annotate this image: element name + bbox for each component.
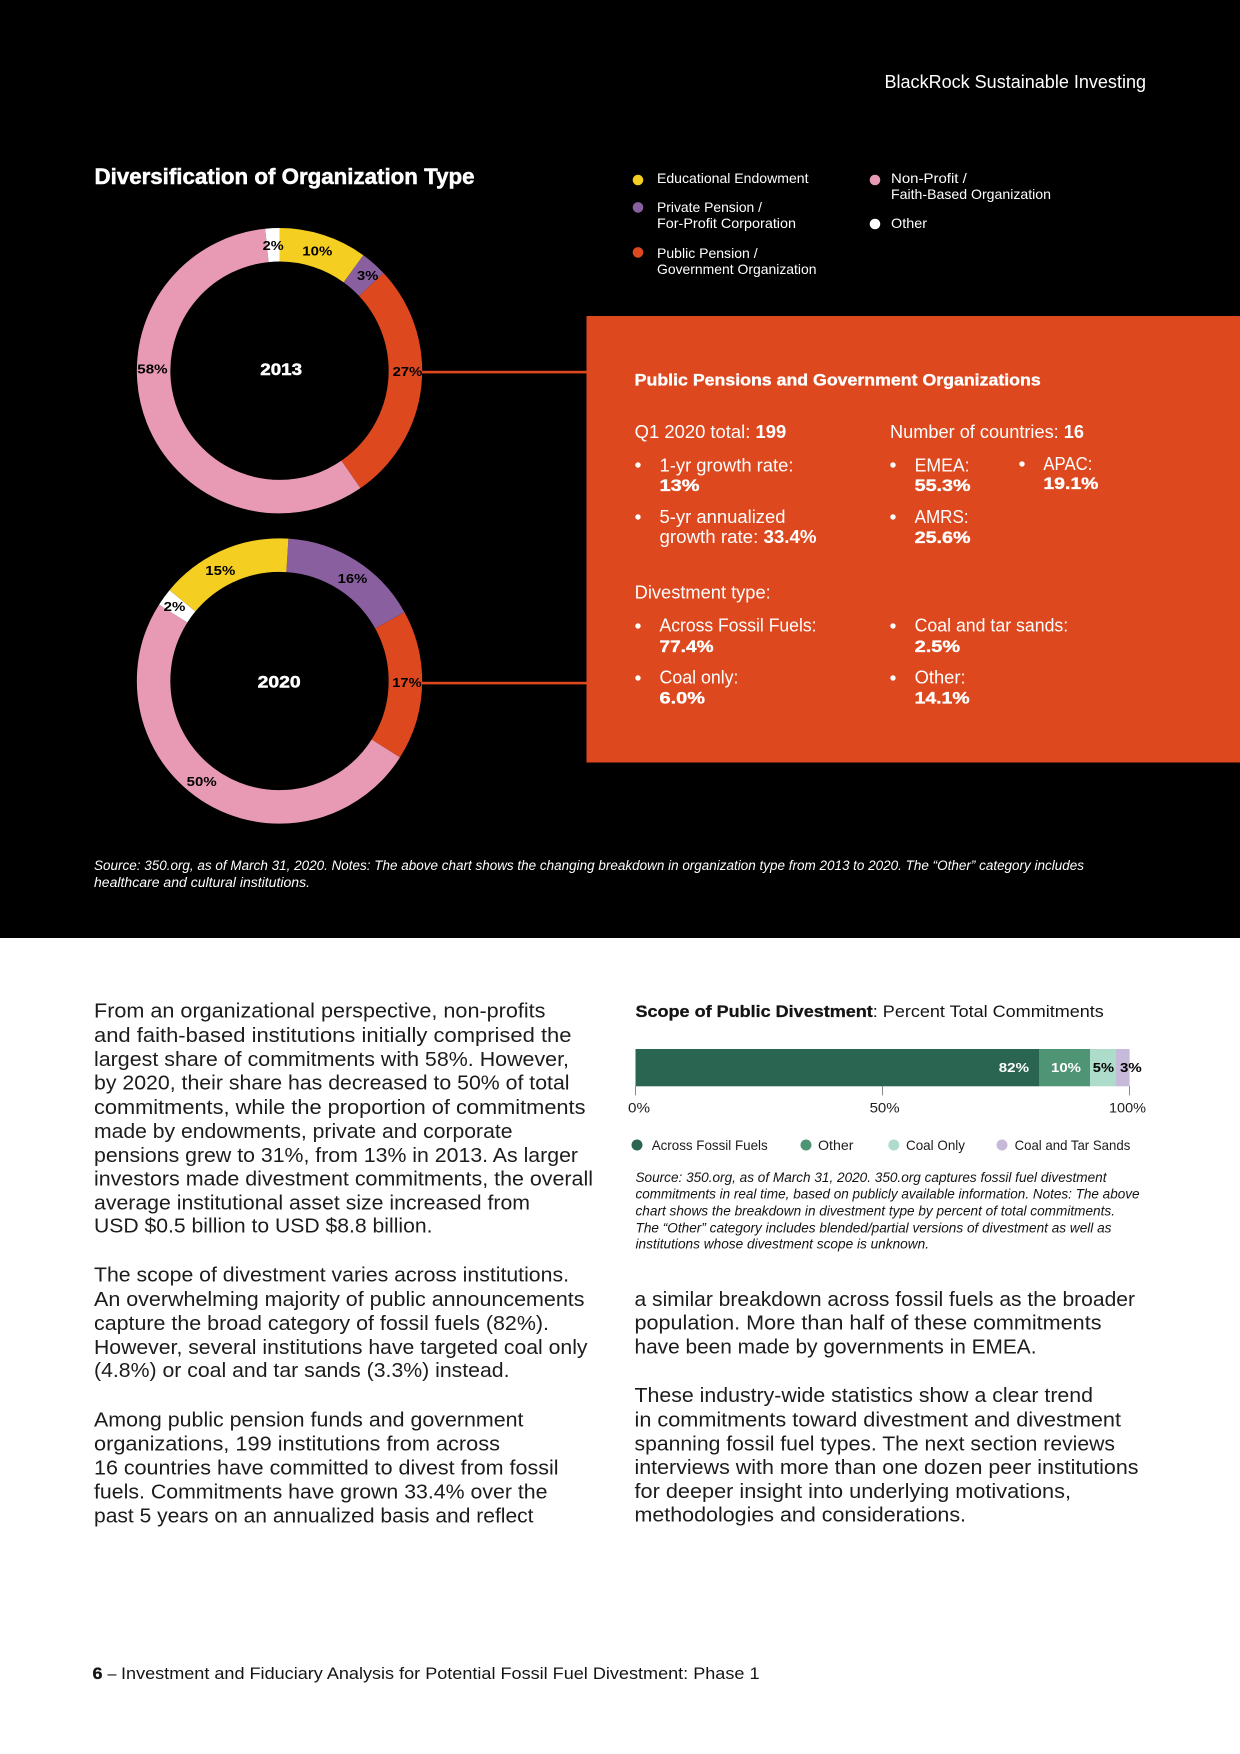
text block: right column body copy: have been made by governments in EMEA.	[634, 1337, 1036, 1359]
donut chart: 2013: 3%	[357, 268, 379, 283]
text block: left column body copy: largest share of commitments with 58%. However,	[94, 1049, 569, 1071]
source note: divestment chart: chart shows the breakdown in divestment type by percent of total commitments.	[636, 1204, 1115, 1219]
stat heading: divestment type: Divestment type:	[635, 583, 771, 603]
axis ticks and labels: 50%	[870, 1100, 900, 1116]
text block: right column body copy: a similar breakdown across fossil fuels as the broader	[634, 1289, 1135, 1311]
bullets: growth rates: 1-yr growth rate:	[660, 455, 794, 475]
bullets: divestment types: 2.5%	[915, 637, 960, 656]
legend: organization types	[633, 170, 1051, 277]
chart title: Scope of Public Divestment : Percent Total Commitments	[636, 1002, 1104, 1021]
text block: left column body copy: USD $0.5 billion to USD $8.8 billion.	[94, 1216, 432, 1238]
bullets: divestment types: 77.4%	[660, 637, 714, 656]
legend: divestment scope: Coal and Tar Sands	[1015, 1137, 1130, 1153]
bullets: divestment types: 6.0%	[660, 689, 705, 708]
text block: left column body copy: commitments, while the proportion of commitments	[94, 1097, 586, 1119]
text block: left column body copy: Among public pension funds and government	[94, 1410, 524, 1432]
footer: page number and document title: Investment and Fiduciary Analysis for Potential Fossil Fuel Divestment: Phase 1	[121, 1664, 760, 1683]
stacked bar: 10%	[1051, 1060, 1081, 1075]
connector lines from donuts to panel	[420, 371, 590, 684]
source note: organization type chart	[94, 858, 1084, 890]
bullets: divestment types	[635, 616, 1068, 708]
donut chart: 2013: 2%	[263, 238, 284, 253]
legend: organization types: Other	[891, 215, 927, 231]
text block: left column body copy: made by endowments, private and corporate	[94, 1121, 512, 1143]
bullets: divestment types: Coal only:	[660, 668, 738, 688]
legend: organization types: Educational Endowment	[657, 170, 809, 186]
donut chart: 2020: 50%	[187, 774, 217, 789]
text block: left column body copy: (4.8%) or coal and tar sands (3.3%) instead.	[94, 1360, 510, 1382]
text block: right column body copy: These industry-wide statistics show a clear trend	[634, 1385, 1093, 1407]
bullets: regions: EMEA:	[915, 455, 970, 475]
stacked bar: 3%	[1120, 1060, 1142, 1075]
legend: organization types: Non-Profit /	[891, 170, 967, 186]
axis ticks and labels: 100%	[1109, 1100, 1146, 1116]
axis ticks and labels	[628, 1086, 1146, 1116]
legend: divestment scope: Across Fossil Fuels	[652, 1137, 768, 1153]
text block: left column body copy: past 5 years on an annualized basis and reflect	[94, 1505, 534, 1527]
text block: left column body copy: The scope of divestment varies across institutions.	[94, 1264, 569, 1286]
text block: left column body copy: and faith-based institutions initially comprised the	[94, 1025, 572, 1047]
text block: right column body copy	[634, 1289, 1138, 1526]
text block: left column body copy: pensions grew to 31%, from 13% in 2013. As larger	[94, 1145, 578, 1167]
footer: page number and document title: –	[108, 1664, 117, 1683]
axis ticks and labels: 0%	[628, 1100, 650, 1116]
text block: left column body copy: by 2020, their share has decreased to 50% of total	[94, 1073, 570, 1095]
bullets: divestment types: 14.1%	[915, 689, 970, 708]
stat: number of countries: Number of countries: 16	[890, 422, 1084, 442]
legend: divestment scope: Coal Only	[906, 1137, 965, 1153]
bullets: growth rates: 5-yr annualized	[660, 507, 786, 527]
text block: left column body copy: average institutional asset size increased from	[94, 1193, 530, 1215]
bullets: divestment types: Other:	[915, 668, 966, 688]
source note: divestment chart: Source: 350.org, as of March 31, 2020. 350.org captures fossil fuel divestment	[636, 1170, 1108, 1185]
donut chart: 2020: 16%	[338, 571, 368, 586]
source note: divestment chart: The “Other” category includes blended/partial versions of divestment as well as	[636, 1220, 1112, 1235]
stacked bar: 5%	[1093, 1060, 1114, 1075]
text block: left column body copy: From an organizational perspective, non-profits	[94, 1001, 546, 1023]
bullets: regions	[890, 454, 1098, 547]
source note: divestment chart	[636, 1170, 1140, 1252]
donut chart: 2013: 27%	[393, 364, 423, 379]
donut chart: 2013: 10%	[302, 244, 333, 259]
bullets: divestment types: Coal and tar sands:	[915, 616, 1068, 636]
bullets: growth rates: growth rate: 33.4%	[660, 527, 816, 547]
footer: page number and document title: 6	[92, 1664, 102, 1683]
legend: divestment scope	[632, 1137, 1130, 1153]
donut chart: 2013: 2013	[260, 360, 302, 379]
donut chart: 2020: 15%	[205, 563, 236, 578]
bullets: regions: AMRS:	[915, 507, 969, 527]
bullets: regions: 19.1%	[1043, 474, 1098, 493]
source note: organization type chart: healthcare and cultural institutions.	[94, 875, 310, 890]
legend: divestment scope: Other	[818, 1137, 854, 1153]
donut chart: 2020	[154, 555, 422, 807]
header: report name: BlackRock Sustainable Investing	[884, 72, 1146, 92]
legend: organization types: Government Organization	[657, 261, 816, 277]
text block: left column body copy	[94, 1001, 593, 1527]
text block: left column body copy: fuels. Commitments have grown 33.4% over the	[94, 1481, 548, 1503]
text block: left column body copy: capture the broad category of fossil fuels (82%).	[94, 1313, 549, 1335]
bullets: regions: 25.6%	[915, 528, 971, 547]
stacked bar	[636, 1049, 1142, 1086]
text block: left column body copy: organizations, 199 institutions from across	[94, 1433, 500, 1455]
text block: left column body copy: However, several institutions have targeted coal only	[94, 1337, 588, 1359]
text block: right column body copy: in commitments toward divestment and divestment	[634, 1410, 1121, 1432]
bullets: regions: 55.3%	[915, 476, 971, 495]
donut chart: 2020: 17%	[392, 675, 422, 690]
title: diversification of organization type: Diversification of Organization Type	[94, 164, 475, 189]
stacked bar: 82%	[999, 1060, 1029, 1075]
chart: scope of public divestment	[628, 1002, 1146, 1252]
legend: organization types: Private Pension /	[657, 199, 762, 215]
legend: organization types: For-Profit Corporation	[657, 215, 796, 231]
text block: right column body copy: methodologies and considerations.	[634, 1504, 966, 1526]
text block: left column body copy: investors made divestment commitments, the overall	[94, 1168, 593, 1190]
panel: public pensions and government organizations	[586, 316, 1240, 762]
donut chart: 2013	[137, 238, 423, 497]
legend: organization types: Faith-Based Organization	[891, 186, 1051, 202]
panel heading: Public Pensions and Government Organizations	[635, 370, 1041, 390]
text block: right column body copy: population. More than half of these commitments	[634, 1313, 1102, 1335]
text block: right column body copy: interviews with more than one dozen peer institutions	[634, 1457, 1138, 1479]
donut chart: 2013: 58%	[137, 362, 168, 377]
bullets: divestment types: Across Fossil Fuels:	[660, 616, 816, 636]
stat: Q1 2020 total: Q1 2020 total: 199	[635, 422, 786, 442]
text block: right column body copy: for deeper insight into underlying motivations,	[634, 1481, 1071, 1503]
text block: left column body copy: 16 countries have committed to divest from fossil	[94, 1457, 558, 1479]
bullets: regions: APAC:	[1043, 454, 1092, 474]
source note: divestment chart: commitments in real time, based on publicly available information. Notes: The above	[636, 1187, 1140, 1202]
donut chart: 2020: 2%	[164, 599, 186, 614]
donut chart: 2020: 2020	[258, 673, 301, 692]
source note: divestment chart: institutions whose divestment scope is unknown.	[636, 1237, 929, 1252]
panel: black upper section	[0, 0, 1240, 938]
bullets: growth rates: 13%	[660, 476, 700, 495]
legend: organization types: Public Pension /	[657, 245, 758, 261]
bullets: growth rates	[635, 455, 816, 547]
source note: organization type chart: Source: 350.org, as of March 31, 2020. Notes: The above chart shows the changing breakdown in organization type from 2013 to 2020. The “Other” category includes	[94, 858, 1084, 873]
text block: left column body copy: An overwhelming majority of public announcements	[94, 1289, 584, 1311]
text block: right column body copy: spanning fossil fuel types. The next section reviews	[634, 1433, 1115, 1455]
